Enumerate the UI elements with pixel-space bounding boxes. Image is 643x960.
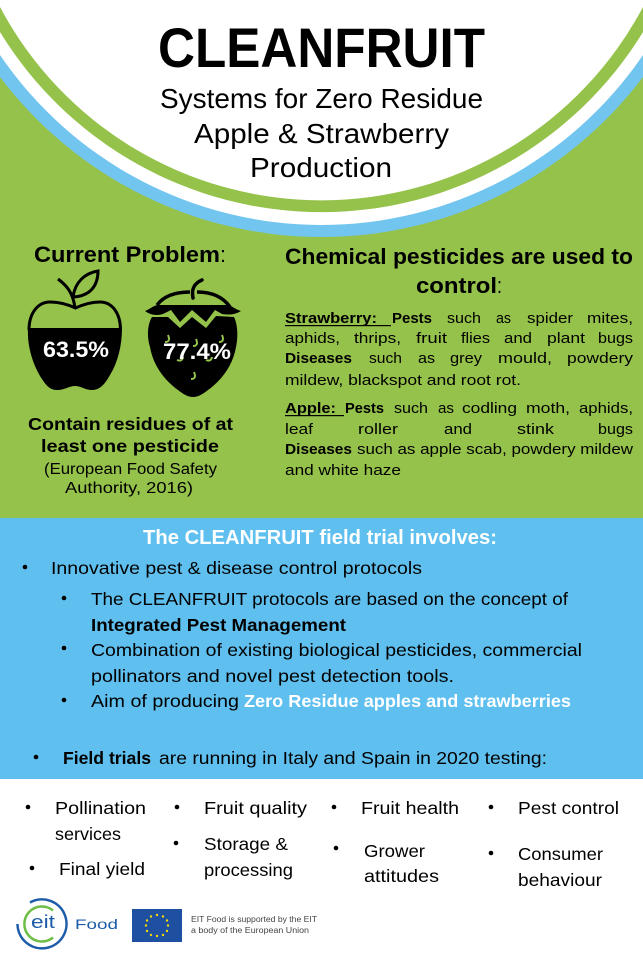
- text: EU support: a body of the European Union: [191, 926, 309, 935]
- list: testing topics: attitudes: [364, 866, 439, 886]
- panel: chemical pesticides: [285, 244, 634, 479]
- subtitle: Production: [250, 152, 392, 183]
- title: [158, 16, 485, 183]
- text: apple pests and diseases: bugs: [598, 421, 633, 438]
- text: field trials running: are running in Italy and Spain in 2020 testing:: [159, 748, 547, 768]
- text: strawberry pests and diseases: Diseases: [285, 350, 352, 367]
- list: testing topics: [26, 798, 619, 890]
- list: protocols: The CLEANFRUIT protocols are based on the concept of: [91, 589, 568, 609]
- panel: field trial: [0, 518, 643, 779]
- list: testing topics: services: [55, 824, 121, 844]
- list: testing topics: Fruit health: [361, 798, 459, 818]
- heading: chemical pesticides: :: [497, 273, 502, 298]
- heading: current problem: Current Problem: [34, 242, 220, 267]
- icon: EU flag: [132, 909, 182, 942]
- text: contain residues: least one pesticide: [41, 436, 219, 456]
- text: strawberry pests and diseases: fruit: [416, 330, 448, 347]
- list: testing topics: Consumer: [518, 844, 603, 864]
- text: strawberry pests and diseases: thrips,: [354, 330, 401, 347]
- text: strawberry pests and diseases: such: [369, 350, 402, 367]
- text: strawberry pests and diseases: mildew, blackspot and root rot.: [285, 372, 521, 389]
- text: contain residues: Contain residues of at: [28, 414, 233, 434]
- heading: chemical pesticides: [285, 244, 633, 298]
- text: source: Authority, 2016): [65, 480, 193, 497]
- text: strawberry pests and diseases: flies: [461, 330, 490, 347]
- text: strawberry pests and diseases: mites,: [587, 310, 633, 327]
- text: apple pests and diseases: [285, 400, 633, 479]
- list: protocols: Aim of producing: [91, 691, 239, 711]
- text: apple pests and diseases: such: [394, 400, 428, 417]
- text: apple pests and diseases: Diseases: [285, 441, 352, 458]
- text: strawberry pests and diseases: [285, 310, 634, 389]
- icon: apple 63.5%: [28, 271, 122, 390]
- text: apple pests and diseases: roller: [358, 421, 398, 438]
- list: testing topics: Fruit quality: [204, 798, 307, 818]
- text: apple pests and diseases: and white haze: [285, 462, 401, 479]
- text: contain residues: [28, 414, 233, 456]
- text: apple pests and diseases: codling: [462, 400, 517, 417]
- logo: EIT Food: eit: [31, 912, 55, 932]
- heading: field trial: The CLEANFRUIT field trial involves:: [143, 527, 497, 549]
- text: strawberry pests and diseases: plant: [547, 330, 586, 347]
- text: strawberry pests and diseases: aphids,: [285, 330, 340, 347]
- list: testing topics: Final yield: [59, 859, 145, 879]
- list: testing topics: Storage &: [204, 834, 288, 854]
- text: apple pests and diseases: leaf: [285, 421, 314, 438]
- list: testing topics: processing: [204, 860, 293, 880]
- list: protocols: [23, 558, 582, 711]
- panel: current problem: [28, 242, 241, 497]
- list: protocols: pollinators and novel pest detection tools.: [91, 666, 454, 686]
- list: protocols: Combination of existing biological pesticides, commercial: [91, 640, 582, 660]
- text: strawberry pests and diseases: powdery: [567, 350, 634, 367]
- icon: strawberry 77.4%: 77.4%: [163, 339, 231, 364]
- text: apple pests and diseases: as: [438, 400, 454, 417]
- text: apple pests and diseases: moth,: [526, 400, 570, 417]
- title: CLEANFRUIT: [158, 16, 485, 79]
- text: apple pests and diseases: Apple:: [285, 400, 336, 417]
- heading: current problem: :: [220, 242, 226, 267]
- background: green panel with curved header: [0, 0, 643, 520]
- text: strawberry pests and diseases: as: [418, 350, 435, 367]
- subtitle: Apple & Strawberry: [194, 118, 449, 149]
- list: protocols: Integrated Pest Management: [91, 615, 346, 635]
- text: strawberry pests and diseases: bugs: [598, 330, 633, 347]
- text: source: [44, 461, 217, 497]
- heading: chemical pesticides: Chemical pesticides are used to: [285, 244, 633, 269]
- text: strawberry pests and diseases: spider: [527, 310, 573, 327]
- text: apple pests and diseases: and: [444, 421, 472, 438]
- list: testing topics: Grower: [364, 841, 425, 861]
- text: field trials running: [34, 748, 547, 768]
- text: strawberry pests and diseases: Pests: [392, 310, 432, 327]
- list: protocols: Zero Residue apples and strawberries: [244, 691, 571, 711]
- list: testing topics: Pollination: [55, 798, 146, 818]
- text: apple pests and diseases: stink: [517, 421, 555, 438]
- text: apple pests and diseases: aphids,: [579, 400, 633, 417]
- text: EU support: [191, 915, 317, 935]
- text: source: (European Food Safety: [44, 461, 217, 478]
- text: strawberry pests and diseases: grey: [450, 350, 483, 367]
- subtitle: [160, 83, 483, 183]
- text: strawberry pests and diseases: mould,: [498, 350, 552, 367]
- subtitle: Systems for Zero Residue: [160, 83, 483, 114]
- text: strawberry pests and diseases: and: [504, 330, 532, 347]
- text: strawberry pests and diseases: as: [496, 310, 511, 327]
- text: EU support: EIT Food is supported by the EIT: [191, 915, 317, 924]
- list: protocols: Innovative pest & disease control protocols: [51, 558, 422, 578]
- logo: EIT Food: Food: [75, 916, 118, 932]
- list: testing topics: Pest control: [518, 798, 619, 818]
- text: field trials running: Field trials: [63, 748, 151, 768]
- icon: apple 63.5%: 63.5%: [43, 337, 109, 362]
- icon: strawberry 77.4%: [145, 280, 241, 397]
- heading: chemical pesticides: control: [416, 273, 497, 298]
- text: apple pests and diseases: such as apple scab, powdery mildew: [357, 441, 633, 458]
- text: strawberry pests and diseases: Strawberry:: [285, 310, 377, 327]
- text: strawberry pests and diseases: such: [447, 310, 481, 327]
- text: apple pests and diseases: Pests: [345, 400, 384, 417]
- list: testing topics: behaviour: [518, 870, 602, 890]
- logo: EIT Food: [18, 899, 118, 948]
